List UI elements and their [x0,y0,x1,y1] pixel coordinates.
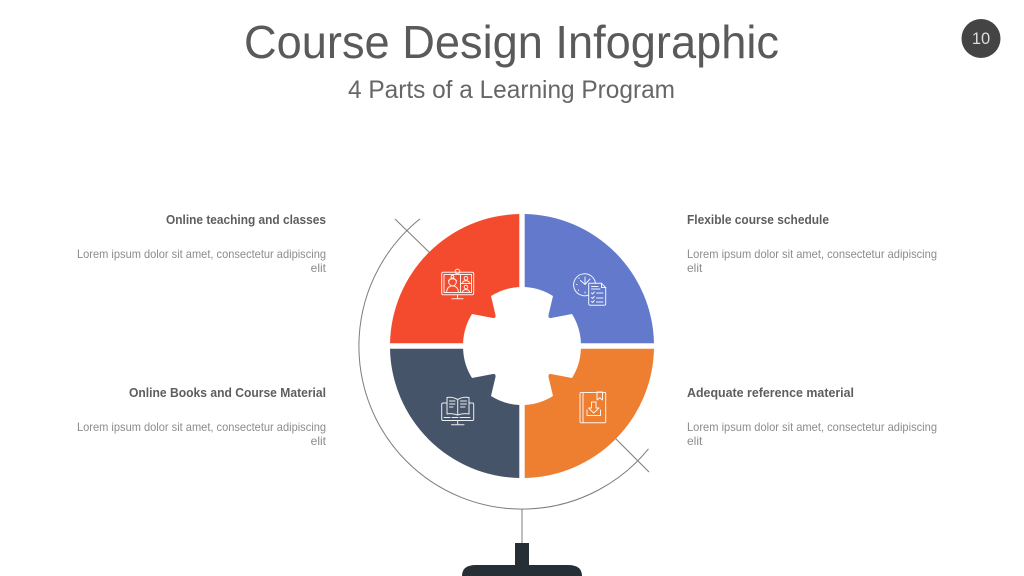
text block: online books and course material: elit [311,434,327,448]
text block: online teaching and classes: Online teaching and classes [166,213,326,227]
icon: download book [580,392,606,423]
segment: dark slate [390,349,519,478]
text block: online teaching and classes [77,213,327,275]
text block: adequate reference material: elit [687,434,703,448]
title: Course Design Infographic [244,16,779,68]
text block: online books and course material: Lorem ipsum dolor sit amet, consectetur adipiscing [77,420,326,434]
icon: online book [442,397,474,425]
text block: adequate reference material [687,386,937,448]
text block: online books and course material: Online Books and Course Material [129,386,326,400]
icon: clock and checklist [574,274,606,305]
text block: flexible course schedule: elit [687,261,703,275]
text block: flexible course schedule: Lorem ipsum dolor sit amet, consectetur adipiscing [687,247,937,261]
text block: flexible course schedule: Flexible course schedule [687,213,829,227]
icon: video class [442,269,474,299]
subtitle: 4 Parts of a Learning Program [348,76,675,104]
text block: flexible course schedule [687,213,937,275]
page number badge: 10 [972,30,990,48]
page number badge [962,19,1000,58]
segment: blue [525,214,654,343]
segment: orange [525,349,654,478]
globe stand [462,543,582,576]
text block: online teaching and classes: elit [311,261,327,275]
text block: online teaching and classes: Lorem ipsum dolor sit amet, consectetur adipiscing [77,247,326,261]
segment: red [390,214,519,343]
text block: online books and course material [77,386,327,448]
text block: adequate reference material: Adequate reference material [687,386,854,400]
globe arc with ticks [359,219,649,543]
text block: adequate reference material: Lorem ipsum dolor sit amet, consectetur adipiscing [687,420,937,434]
